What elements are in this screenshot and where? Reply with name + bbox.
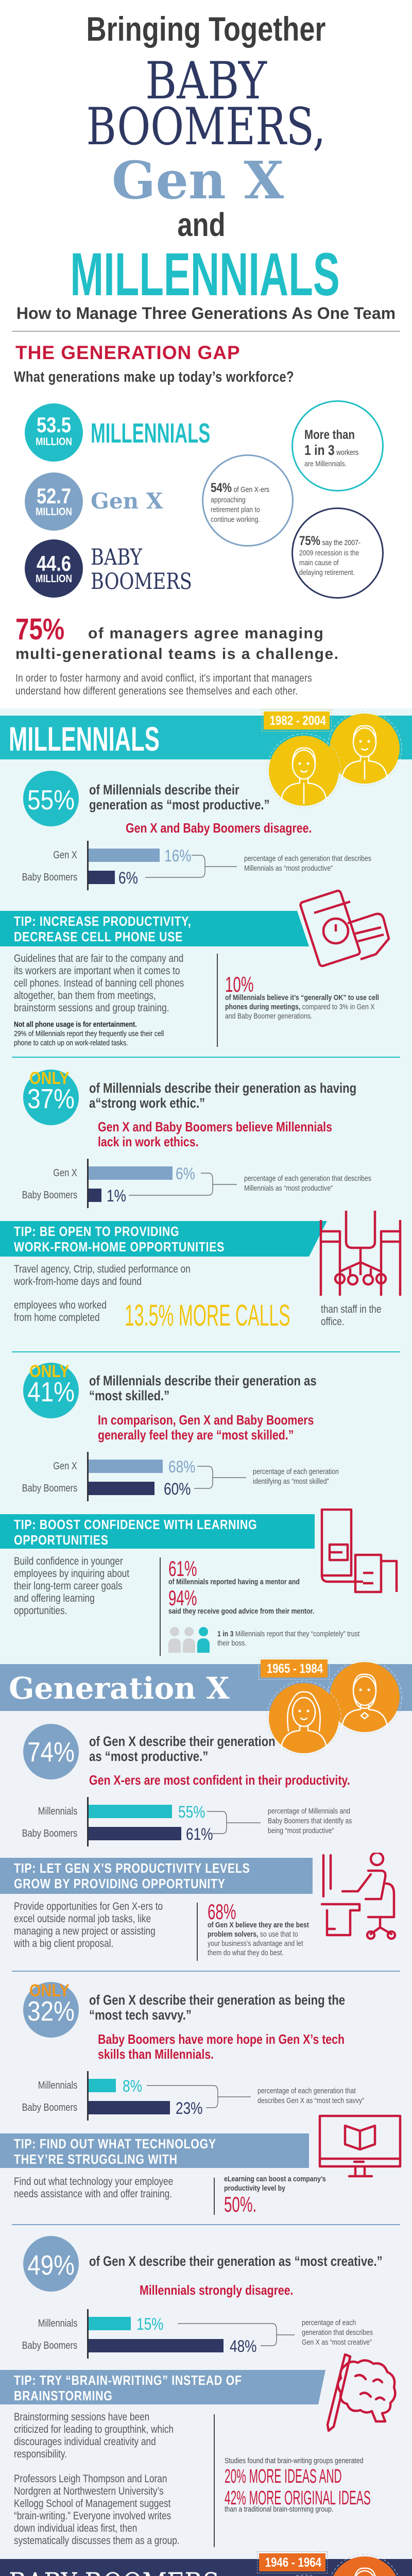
circle: 53.5 million: MILLION [36, 436, 72, 448]
tip band: learning opportunities: OPPORTUNITIES [14, 1532, 109, 1548]
tip band: productivity levels: TIP: LET GEN X’S PRODUCTIVITY LEVELS [14, 1860, 250, 1876]
circle: 44.6 million: MILLION [36, 573, 72, 585]
title: MILLENNIALS: MILLENNIALS [70, 241, 340, 309]
band: generation x [0, 1664, 412, 1711]
paragraph: brainstorming [14, 2411, 180, 2547]
stat: only 32% tech savvy [23, 1982, 79, 2038]
stat text [89, 1992, 345, 2023]
stat text: 10%: phones during meetings, compared to 3% in Gen X [225, 1003, 375, 1011]
icon: person at desk [320, 1853, 397, 1940]
bar chart 3: Gen X [54, 1461, 77, 1472]
avatars: gen x [267, 1660, 402, 1756]
big stat: more ideas: 20% MORE IDEAS AND [225, 2466, 342, 2487]
bar chart 4: being “most productive” [268, 1826, 334, 1835]
icon: books [320, 1509, 398, 1593]
red callout: Baby Boomers have more hope in Gen X’s tech [98, 2031, 345, 2047]
year tag: 1946-1964 [259, 2553, 325, 2571]
callout: 54% gen x: 54% of Gen X-ers [211, 481, 269, 495]
paragraph: cell phone guidelines: Guidelines that are fair to the company and [14, 953, 183, 964]
tip band: cell phone [0, 911, 309, 946]
red callout: Millennials strongly disagree. [140, 2282, 294, 2298]
title: BOOMERS,: BOOMERS, [87, 97, 325, 157]
note: phone usage: phone to catch up on work-related tasks. [14, 1039, 128, 1047]
big stat: more ideas: 42% MORE ORIGINAL IDEAS [225, 2487, 371, 2509]
circle: 53.5 million: 53.5 [37, 413, 71, 437]
intro paragraph: In order to foster harmony and avoid conflict, it's important that managers [15, 672, 312, 684]
bar chart 6: 48% [230, 2337, 257, 2355]
question heading: What generations make up today’s workforce? [14, 369, 294, 385]
stat text: elearning: eLearning can boost a company’s [224, 2175, 326, 2183]
paragraph: gen x opportunities [14, 1901, 163, 1950]
red callout: skills than Millennials. [98, 2046, 214, 2062]
bar chart 5: Baby Boomers [22, 2102, 77, 2113]
avatars: millennials [267, 711, 402, 808]
note: phone usage [14, 1020, 164, 1047]
bar chart 5: 8% [123, 2077, 142, 2095]
title: and: and [177, 206, 226, 243]
bar chart 6: Millennials [38, 2318, 77, 2329]
stat text: of Gen X describe their generation as “most creative.” [89, 2253, 383, 2269]
bar chart 3 [22, 1452, 339, 1501]
stat text: of Millennials describe their generation as [89, 1373, 317, 1388]
red callout: lack in work ethics. [98, 1133, 199, 1149]
stat: only 37% work ethic: ONLY [29, 1069, 70, 1088]
bar chart 2: 1% [107, 1187, 126, 1205]
callout: 54% gen x: approaching [211, 496, 246, 504]
stat text: traditional: than a traditional brain-storming group. [225, 2505, 333, 2514]
stat text [89, 1734, 276, 1764]
circle: 52.7 million: MILLION [36, 506, 72, 518]
bar chart 2: percentage of each generation that describes [244, 1174, 371, 1183]
red callout [98, 1119, 332, 1149]
stat text: elearning: productivity level by [224, 2184, 285, 2193]
bar chart 3: identifying as “most skilled” [253, 1477, 329, 1486]
icon: desk chair [319, 1211, 402, 1296]
stat text: “most skilled.” [89, 1388, 169, 1403]
bar chart 6: Gen X as “most creative” [302, 2338, 372, 2347]
year tag: 1982-2004: 1982 - 2004 [270, 714, 326, 728]
red callout: Gen X-ers are most confident in their productivity. [89, 1772, 350, 1788]
tip band: productivity levels: GROW BY PROVIDING OPPORTUNITY [14, 1876, 226, 1891]
stat text [89, 782, 270, 812]
stat text: 10%: of Millennials believe it’s “generally OK” to use cell [225, 993, 379, 1002]
paragraph: build confidence: Build confidence in younger [14, 1555, 123, 1567]
stat text: of Gen X describe their generation as being the [89, 1992, 345, 2008]
bar chart 2 [22, 1159, 371, 1208]
stat: 75% of managers: 75% [15, 613, 64, 646]
red callout: Gen X and Baby Boomers believe Millennials [98, 1119, 332, 1134]
section backgrounds [0, 708, 412, 1664]
bar chart 5 [22, 2071, 364, 2121]
paragraph: find out technology: needs assistance with and offer training. [14, 2188, 172, 2200]
stat text [208, 1921, 309, 1957]
stat text: studies: Studies found that brain-writing groups generated [225, 2456, 363, 2465]
stat text: elearning [224, 2175, 326, 2193]
bar chart 5: 23% [176, 2099, 203, 2117]
heading: the generation gap: THE GENERATION GAP [15, 342, 241, 363]
stat text [89, 1080, 356, 1111]
bar chart 4: 61% [186, 1825, 213, 1843]
avatars: baby boomers [265, 2553, 404, 2576]
stat text: as “most productive.” [89, 1749, 208, 1764]
title: Bringing Together: Bringing Together [87, 10, 325, 48]
title: BABY: BABY [145, 52, 267, 111]
year tag: 1965-1984 [261, 1659, 328, 1677]
tip band: work from home: WORK-FROM-HOME OPPORTUNITIES [14, 1239, 225, 1255]
callout: 75% recession [291, 507, 384, 599]
band: millennials: MILLENNIALS [9, 720, 160, 758]
stat: 75% of managers: of managers agree managing [88, 625, 324, 642]
callout: 54% gen x [202, 454, 294, 547]
label: baby boomers: BOOMERS [91, 569, 192, 595]
title: Gen X: Gen X [112, 150, 284, 211]
bar chart 1: 16% [164, 846, 192, 865]
paragraph: brainstorming: Nordgren at Northwestern University’s [14, 2485, 164, 2497]
stat text: a“strong work ethic.” [89, 1095, 205, 1111]
red callout [98, 1412, 314, 1443]
stat text: generation as “most productive.” [89, 797, 270, 812]
paragraph: brainstorming: Professors Leigh Thompson and Loran [14, 2473, 167, 2485]
intro paragraph: understand how different generations see themselves and each other. [15, 685, 298, 697]
bar chart 5: percentage of each generation that [258, 2087, 356, 2095]
stat: 75% of managers [15, 613, 339, 697]
label: baby boomers: BABY [91, 545, 142, 570]
callout: 1 in 3 workers: 1 in 3 workers [304, 442, 358, 458]
bar chart 6: generation that describes [302, 2328, 373, 2337]
bar chart 4: percentage of Millennials and [268, 1807, 350, 1816]
bar chart 4: Baby Boomers that identify as [268, 1817, 352, 1825]
stat: 50%: 50%. [224, 2192, 256, 2216]
stat: only 37% work ethic: 37% [27, 1083, 75, 1114]
bar chart 4: Baby Boomers [22, 1828, 77, 1839]
stat: 49% most creative [23, 2236, 79, 2292]
text: trust their boss: 1 in 3 Millennials report that they “completely” trust [217, 1630, 359, 1638]
note: phone usage: 29% of Millennials report they frequently use their cell [14, 1029, 164, 1038]
paragraph: ctrip [14, 1263, 191, 1287]
callout: 54% gen x: retirement plan to [211, 505, 260, 514]
tip band: work from home [0, 1221, 330, 1257]
stat text: your business's advantage and let [208, 1939, 303, 1948]
icon: phone in hand [299, 889, 390, 967]
bar chart 2: Gen X [54, 1167, 77, 1179]
bar chart 6 [22, 2309, 373, 2359]
stat: 74% most productive [23, 1724, 79, 1780]
bar chart 4: Millennials [38, 1806, 77, 1817]
bar chart 1: Gen X [54, 850, 77, 861]
paragraph: build confidence: their long-term career goals [14, 1580, 123, 1592]
paragraph: cell phone guidelines: its workers are important when it comes to [14, 965, 180, 977]
paragraph: brainstorming: discourages individual creativity and [14, 2436, 156, 2448]
stat: 10%: 10% [225, 972, 253, 996]
stat: only 32% tech savvy: ONLY [29, 1981, 70, 2001]
tip band: work from home: TIP: BE OPEN TO PROVIDING [14, 1224, 179, 1239]
paragraph: brainstorming: systematically discusses them as a group. [14, 2535, 180, 2547]
stat text: of Millennials reported having a mentor and [168, 1578, 300, 1586]
stat: only 41% most skilled: 41% [27, 1377, 75, 1408]
paragraph: brainstorming: criticized for leading to groupthink, which [14, 2424, 174, 2435]
stat: 94%: 94% [168, 1586, 197, 1610]
big stat: 13.5% more calls: 13.5% MORE CALLS [125, 1299, 290, 1332]
stat: 61% mentor: 61% [168, 1556, 197, 1581]
tip band: brain-writing [0, 2370, 327, 2404]
paragraph: build confidence: employees by inquiring about [14, 1568, 129, 1580]
tip band: brain-writing: BRAINSTORMING [14, 2388, 113, 2403]
text: employees who worked: from home completed [14, 1312, 100, 1324]
tip band: learning opportunities: TIP: BOOST CONFIDENCE WITH LEARNING [14, 1517, 257, 1532]
subtitle: How to Manage Three Generations As One Team [16, 304, 396, 323]
paragraph: cell phone guidelines [14, 953, 184, 1014]
bar chart 3: Baby Boomers [22, 1483, 77, 1494]
callout: 75% recession: 2009 recession is the [299, 549, 359, 557]
bar chart 6: percentage of each [302, 2318, 356, 2327]
stat: 55% most productive: 55% [27, 785, 75, 816]
paragraph: gen x opportunities: Provide opportunities for Gen X-ers to [14, 1901, 163, 1912]
tip band: brain-writing: TIP: TRY “BRAIN-WRITING” INSTEAD OF [14, 2372, 242, 2388]
icon: people 1 in 3 [168, 1627, 210, 1653]
text: employees who worked [14, 1299, 107, 1324]
stat text: 10%: and Baby Boomer generations. [225, 1012, 313, 1021]
paragraph: cell phone guidelines: altogether, ban them from meetings, [14, 990, 156, 1002]
stat text: 10% [225, 993, 379, 1021]
paragraph: build confidence: and offering learning [14, 1592, 95, 1604]
bar chart 6: Baby Boomers [22, 2340, 77, 2351]
stat: 49% most creative: 49% [27, 2250, 75, 2281]
paragraph: brainstorming: Kellogg School of Management suggest [14, 2498, 170, 2510]
stat text: of Millennials describe their generation as having [89, 1080, 356, 1096]
bar chart 3: percentage of each generation [253, 1467, 339, 1476]
band: generation x: Generation X [9, 1671, 230, 1706]
circle: 52.7 million [25, 472, 83, 531]
tip band: technology: TIP: FIND OUT WHAT TECHNOLOGY [14, 2136, 216, 2151]
callout: 75% recession: delaying retirement. [299, 568, 355, 577]
paragraph: build confidence [14, 1555, 129, 1617]
tip band: learning opportunities [0, 1514, 315, 1549]
circle: 53.5 million [25, 403, 83, 462]
paragraph: brainstorming: down individual ideas first, then [14, 2522, 137, 2534]
tip band: cell phone: DECREASE CELL PHONE USE [14, 929, 183, 944]
bar chart 1 [22, 841, 371, 890]
circle: 44.6 million: 44.6 [37, 551, 71, 575]
callout: 75% recession: main cause of [299, 558, 339, 567]
stat: only 32% tech savvy: 32% [27, 1996, 75, 2027]
circle: 44.6 million [25, 539, 83, 598]
paragraph: ctrip: Travel agency, Ctrip, studied performance on [14, 1263, 191, 1275]
text: than staff: than staff in the [321, 1303, 381, 1315]
label: millennials: MILLENNIALS [91, 418, 210, 449]
callout: 1 in 3 workers: More than [304, 428, 355, 442]
stat: 74% most productive: 74% [27, 1737, 75, 1768]
stat: 55% most productive [23, 771, 79, 826]
stat text: them do what they do best. [208, 1948, 284, 1957]
tip band: cell phone: TIP: INCREASE PRODUCTIVITY, [14, 913, 192, 929]
bar chart 1: percentage of each generation that describes [244, 854, 371, 863]
text: than staff [321, 1303, 381, 1328]
text: trust their boss: their boss. [217, 1639, 247, 1648]
paragraph: gen x opportunities: excel outside normal job tasks, like [14, 1913, 151, 1925]
red callout: Gen X and Baby Boomers disagree. [126, 820, 312, 836]
paragraph: ctrip: work-from-home days and found [14, 1276, 142, 1287]
note: phone usage: Not all phone usage is for entertainment. [14, 1020, 137, 1029]
tip band: technology: THEY’RE STRUGGLING WITH [14, 2151, 178, 2167]
stat text: problem solvers, so use that to [208, 1930, 298, 1939]
bar chart 5: Millennials [38, 2080, 77, 2091]
bar chart 3: 68% [168, 1458, 196, 1476]
year tag: 1982-2004 [264, 711, 330, 730]
stat text: said they receive good advice from their mentor. [168, 1607, 314, 1616]
intro paragraph [15, 672, 312, 697]
callout: 1 in 3 workers [291, 400, 384, 492]
text: trust their boss [217, 1630, 359, 1648]
text: than staff: office. [321, 1316, 345, 1328]
stat text [89, 1373, 317, 1403]
label: baby boomers [91, 545, 192, 595]
stat: only 41% most skilled: ONLY [29, 1362, 70, 1381]
paragraph: build confidence: opportunities. [14, 1605, 67, 1617]
stat text: of Millennials describe their [89, 782, 239, 798]
bar chart 1: Baby Boomers [22, 872, 77, 883]
red callout: generally feel they are “most skilled.” [98, 1427, 294, 1443]
callout: 75% recession: 75% say the 2007- [299, 534, 360, 548]
bar chart 2: Baby Boomers [22, 1190, 77, 1201]
paragraph: gen x opportunities: managing a new project or assisting [14, 1925, 156, 1937]
bar chart 1: 6% [118, 869, 138, 887]
paragraph: brainstorming: Brainstorming sessions have been [14, 2411, 149, 2423]
circle: 52.7 million: 52.7 [37, 484, 71, 508]
paragraph: find out technology [14, 2176, 173, 2200]
year tag: 1965-1984: 1965 - 1984 [267, 1662, 323, 1676]
band: millennials [0, 716, 412, 759]
icon: brain and pencil [327, 2353, 397, 2432]
callout: 54% gen x: continue working. [211, 515, 260, 524]
bar chart 4: 55% [178, 1803, 205, 1821]
red callout [98, 2031, 345, 2062]
big stat: more ideas [225, 2466, 371, 2509]
band: baby boomers [0, 2559, 412, 2576]
year tag: 1946-1964: 1946 - 1964 [265, 2555, 321, 2570]
tip band: productivity levels [0, 1858, 313, 1894]
label: gen x: Gen X [91, 488, 163, 514]
paragraph: cell phone guidelines: brainstorm sessions and group training. [14, 1002, 169, 1014]
callout: 1 in 3 workers: are Millennials. [304, 460, 347, 468]
bar chart 5: describes Gen X as “most tech savvy” [258, 2096, 364, 2105]
stat text: “most tech savvy.” [89, 2007, 192, 2023]
paragraph: brainstorming: “brain-writing.” Everyone involved writes [14, 2510, 171, 2522]
text: employees who worked: employees who worked [14, 1299, 107, 1311]
stat text: of Gen X describe their generation [89, 1734, 276, 1749]
stat text: of Gen X believe they are the best [208, 1921, 309, 1929]
stat: only 41% most skilled [23, 1363, 79, 1418]
bar chart 4 [22, 1797, 352, 1846]
stat: only 37% work ethic [23, 1070, 79, 1125]
bar chart 6: 15% [136, 2315, 164, 2333]
bar chart 1: Millennials as “most productive” [244, 864, 333, 873]
bar chart 2: 6% [176, 1164, 195, 1183]
stat: 75% of managers: multi-generational teams is a challenge. [15, 646, 339, 663]
stat: 68% problem solvers: 68% [208, 1900, 236, 1924]
icon: monitor with book [318, 2114, 402, 2177]
tip band: technology [0, 2133, 309, 2168]
workforce counts [25, 403, 210, 598]
paragraph: gen x opportunities: with a big client proposal. [14, 1938, 113, 1950]
bar chart 3: 60% [164, 1480, 191, 1498]
red callout: In comparison, Gen X and Baby Boomers [98, 1412, 314, 1428]
paragraph: find out technology: Find out what technology your employee [14, 2176, 173, 2188]
paragraph: cell phone guidelines: cell phones. Instead of banning cell phones [14, 977, 184, 989]
paragraph: brainstorming: responsibility. [14, 2448, 67, 2460]
bar chart 2: Millennials as “most productive” [244, 1184, 333, 1193]
